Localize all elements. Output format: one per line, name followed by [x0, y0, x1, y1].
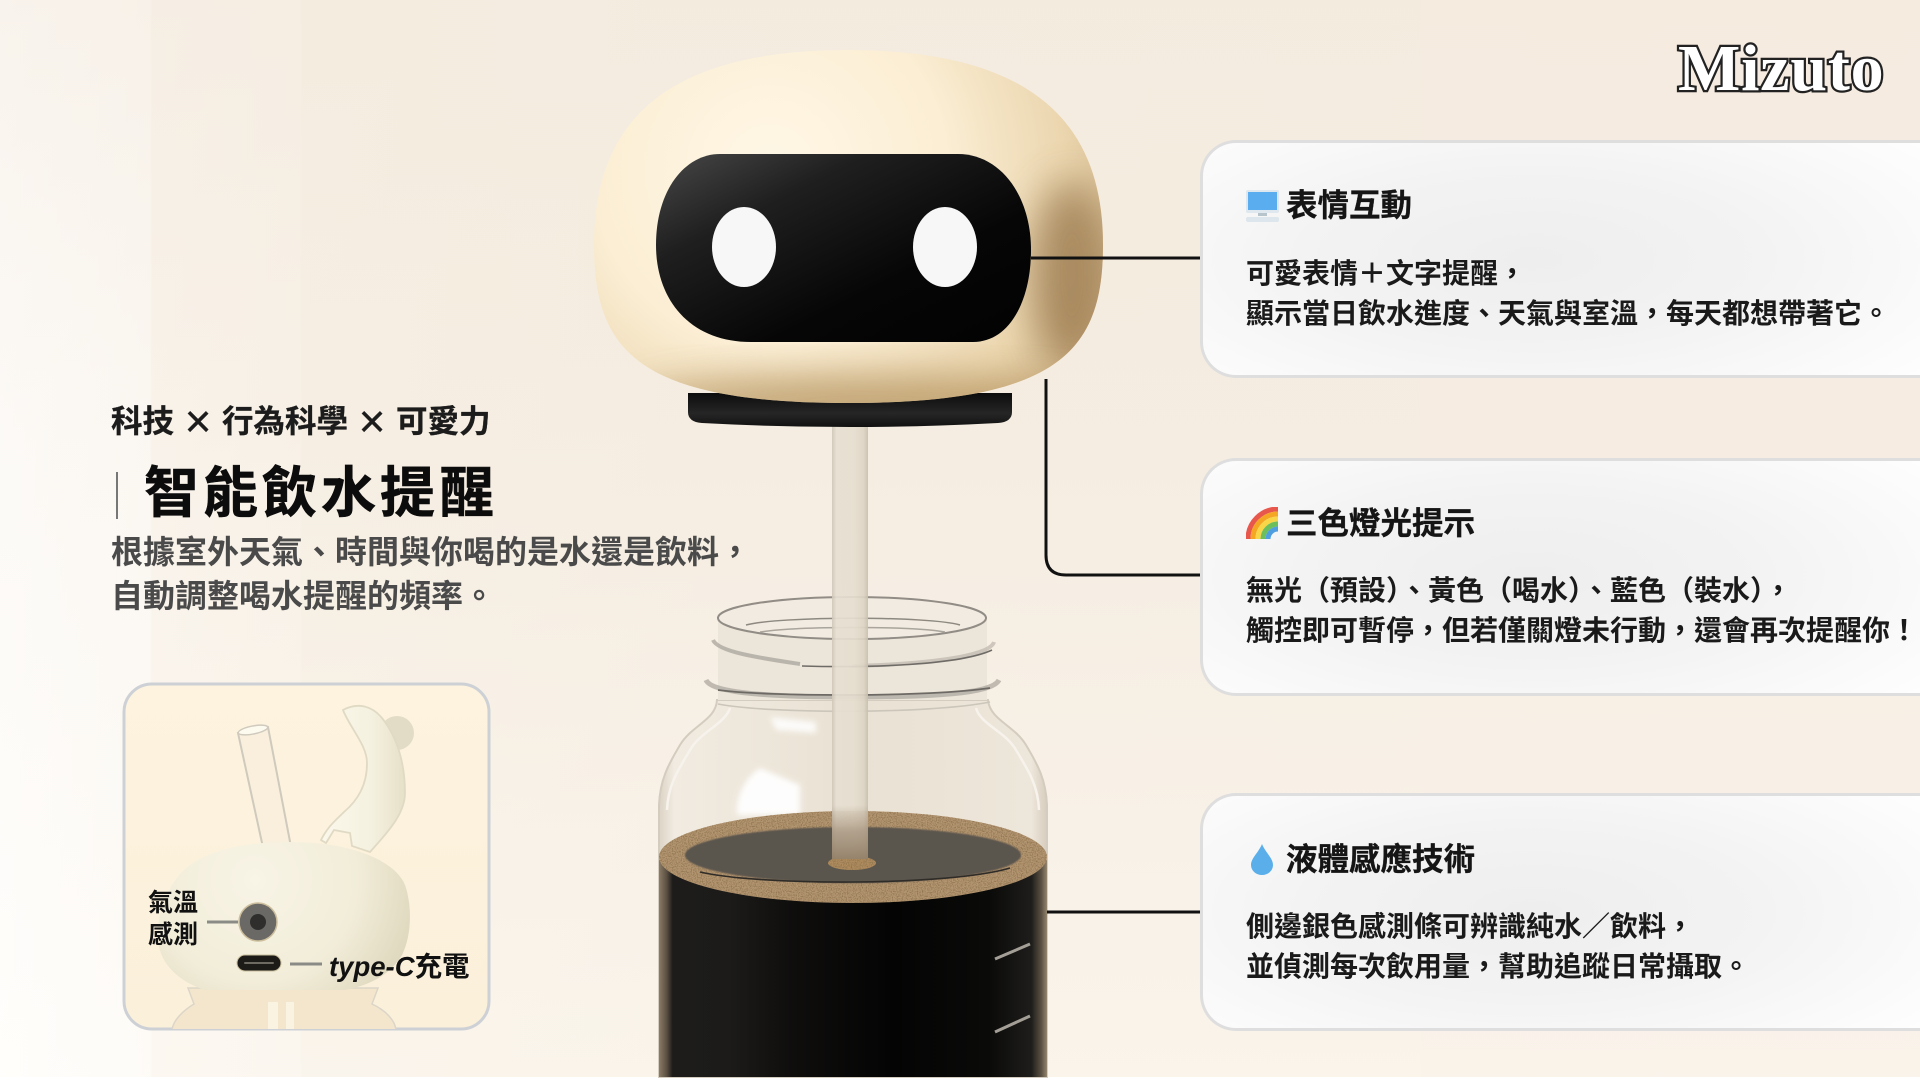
description: 根據室外天氣、時間與你喝的是水還是飲料， [111, 534, 751, 570]
text [1246, 258, 1890, 329]
product illustration: bottle, head and connectors [122, 50, 1200, 1078]
text: 觸控即可暫停，但若僅關燈未行動，還會再次提醒你！ [1246, 615, 1918, 646]
smart cap head [594, 50, 1114, 428]
heading: 表情互動 [1286, 187, 1412, 223]
visor screen [656, 154, 1031, 342]
label: temperature sensing: 氣溫 [148, 889, 198, 917]
tagline [111, 395, 491, 447]
head dome [594, 50, 1103, 403]
text: 可愛表情＋文字提醒， [1246, 258, 1526, 289]
lid knob [380, 716, 414, 750]
inset panel: cap details [124, 684, 489, 1030]
temperature sensor [239, 903, 277, 941]
icon: rainbow [1246, 507, 1278, 539]
tagline: × [185, 395, 211, 447]
usb-c port [237, 955, 281, 971]
description: 自動調整喝水提醒的頻率。 [111, 578, 495, 614]
glass highlights [737, 717, 816, 815]
text [1246, 911, 1750, 982]
right eye [913, 207, 977, 287]
cap body [158, 842, 410, 990]
straw foot [828, 856, 876, 870]
tagline: × [359, 395, 385, 447]
text: 顯示當日飲水進度、天氣與室溫，每天都想帶著它。 [1246, 298, 1890, 329]
heading: 液體感應技術 [1286, 841, 1475, 877]
heading: 三色燈光提示 [1286, 505, 1475, 541]
coffee surface [685, 827, 1021, 883]
head shading [630, 180, 1114, 428]
panel: liquid sensing [1200, 793, 1920, 1031]
main title: 智能飲水提醒 [144, 462, 498, 524]
glass straw [238, 723, 292, 852]
left eye [712, 207, 776, 287]
glass body [659, 700, 1047, 1077]
text [1246, 575, 1918, 646]
label: type-C charging: type-C充電 [329, 951, 470, 982]
tagline: 科技 行為科學 可愛力 [111, 403, 491, 439]
small bottle below cap [172, 988, 396, 1030]
panel: expression interaction [1200, 140, 1920, 378]
panel background [124, 684, 489, 1029]
sensor leader line [207, 920, 238, 924]
text: 側邊銀色感測條可辨識純水／飲料， [1246, 911, 1694, 942]
text: 並偵測每次飲用量，幫助追蹤日常攝取。 [1246, 951, 1750, 982]
brand logo: Mizuto [1678, 32, 1884, 105]
straw [832, 426, 868, 859]
panel: three-colour light [1200, 458, 1920, 696]
connector lines [1031, 258, 1200, 912]
port leader line [290, 962, 322, 966]
text: 無光（預設）、黃色（喝水）、藍色（裝水）， [1246, 575, 1792, 606]
description [111, 534, 751, 614]
icon: water drop [1251, 844, 1273, 875]
glass neck [718, 618, 987, 700]
coffee liquid [659, 860, 1047, 1077]
glass inner contour [667, 708, 1039, 810]
icon: computer [1246, 190, 1279, 222]
cap base ring [688, 393, 1012, 427]
bottle threads and rim [706, 597, 999, 711]
bottle [659, 426, 1047, 1077]
label: temperature sensing: 感測 [148, 920, 198, 949]
measurement ticks [995, 944, 1030, 1032]
flip lid arm [321, 706, 405, 852]
coffee foam [659, 811, 1047, 903]
